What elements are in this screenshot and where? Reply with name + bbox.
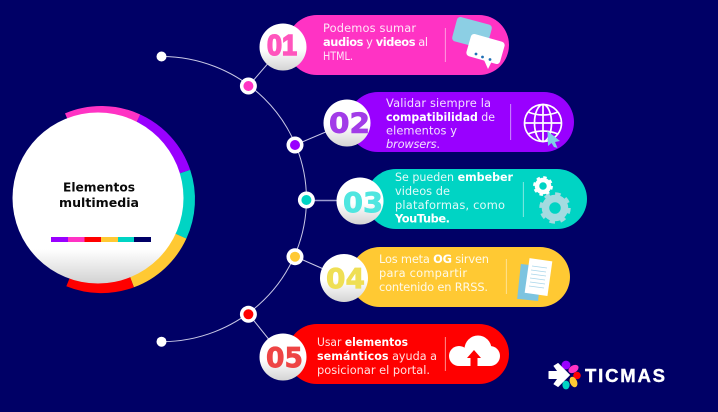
heading: Elementos multimedia: Elementos (63, 180, 135, 194)
number badge 04 (320, 254, 368, 302)
text 01: Podemos sumar (323, 21, 416, 35)
number badge 04: 04 (326, 263, 365, 295)
text 01 (323, 21, 428, 63)
heading second line: multimedia (59, 195, 139, 210)
panel: step 02 (324, 92, 574, 152)
text 04 (379, 252, 489, 294)
number badge 02: 02 (329, 108, 370, 140)
panel: step 04 (320, 247, 570, 307)
pill (287, 324, 509, 384)
icon: globe with cursor (524, 104, 562, 148)
panel: step 03 (336, 169, 587, 229)
text 01: HTML. (323, 49, 353, 63)
node 03 (298, 192, 315, 208)
pill (348, 92, 574, 152)
pill (366, 169, 587, 229)
timeline arc with connectors (162, 46, 360, 357)
ring: coloured segments (69, 115, 185, 284)
text 02 (386, 96, 495, 151)
node 04 (286, 248, 304, 265)
text 01: audios y videos al (323, 35, 428, 49)
colour bar (51, 237, 151, 242)
text 05: semánticos ayuda a (317, 349, 437, 363)
number badge 03: 03 (343, 187, 383, 219)
number badge 05 (260, 334, 306, 380)
node 02 (286, 136, 304, 154)
arc start dot (156, 52, 166, 62)
text 04: Los meta OG sirven (379, 252, 489, 266)
arc end dot (156, 337, 166, 347)
icon: gears (534, 177, 569, 222)
icon: cloud upload (449, 336, 500, 366)
text 03: Se pueden embeber (395, 170, 513, 184)
number badge 05: 05 (266, 342, 303, 374)
text 03: plataformas, como (395, 198, 505, 212)
icon: documents (517, 258, 552, 301)
number badge 02 (324, 100, 370, 146)
panel: central circle (12, 112, 185, 284)
number badge 01 (260, 24, 306, 70)
panel: step 01 (260, 15, 509, 75)
number badge 03 (336, 178, 384, 224)
text 02: browsers. (386, 137, 440, 151)
text 02: Validar siempre la (386, 96, 491, 110)
text 02: compatibilidad de (386, 110, 495, 124)
text 04: contenido en RRSS. (379, 280, 488, 294)
text 03: YouTube. (394, 212, 450, 226)
logo pinwheel (549, 361, 581, 389)
white disc (12, 112, 184, 284)
text 05: posicionar el portal. (317, 363, 430, 377)
pill (350, 247, 570, 307)
text 05 (317, 335, 437, 377)
text 04: para compartir (379, 266, 467, 280)
node 05 (240, 306, 257, 323)
node 01 (240, 78, 257, 94)
text 05: Usar elementos (317, 335, 408, 349)
number badge 01: 01 (267, 30, 297, 62)
pill (287, 15, 509, 75)
text 03: videos de (395, 184, 450, 198)
icon: chat bubbles (451, 16, 505, 69)
panel: step 05 (260, 324, 509, 384)
text 03 (394, 170, 513, 226)
logo: TICMAS (549, 361, 665, 389)
logo wordmark: TICMAS (585, 365, 665, 386)
text 02: elementos y (386, 124, 457, 138)
